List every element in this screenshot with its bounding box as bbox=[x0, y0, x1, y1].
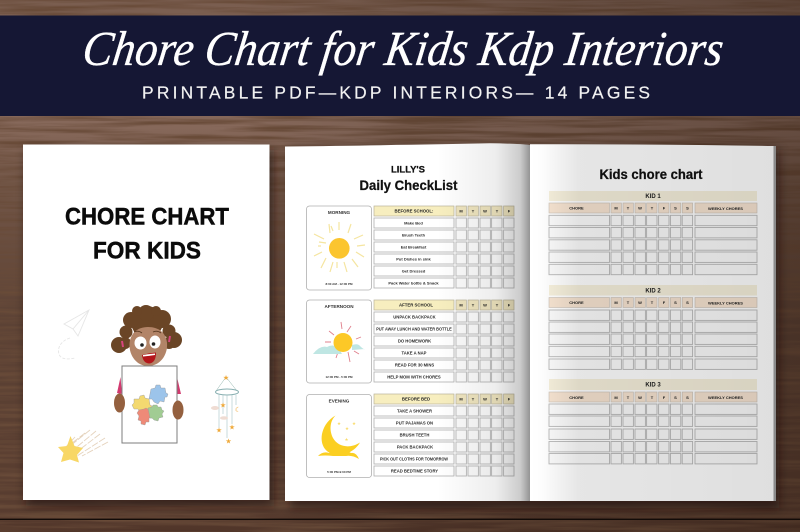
checklist heading: LILLY'S bbox=[391, 164, 425, 176]
panel: morning: BEFORE SCHOOL: bbox=[395, 208, 434, 214]
kid 1 table header: S bbox=[674, 206, 677, 210]
icon: sun and cloud bbox=[313, 322, 365, 362]
kid 3 table header: T bbox=[651, 395, 654, 400]
panel: evening: T bbox=[472, 396, 475, 402]
icon: baby mobile: ★ bbox=[225, 438, 232, 446]
kid 1 table header bbox=[549, 203, 757, 213]
kid 3 table header: WEEKLY CHORES bbox=[708, 395, 743, 400]
face bbox=[129, 327, 167, 366]
table: kid 3: KID 3 bbox=[645, 382, 661, 388]
afternoon card bbox=[306, 300, 372, 383]
kid 3 table header bbox=[549, 392, 757, 402]
kid 1 table header: WEEKLY CHORES bbox=[708, 206, 743, 211]
icon: baby mobile: ★ bbox=[216, 426, 222, 434]
afternoon checklist rows: READ FOR 30 MINS bbox=[395, 362, 434, 368]
table: kid 1 bbox=[549, 191, 757, 275]
kid 3 table header: T bbox=[627, 395, 630, 400]
kid 2 table header: W bbox=[638, 300, 642, 305]
evening checklist header bbox=[374, 394, 454, 404]
afternoon checklist header bbox=[374, 300, 454, 310]
icon: baby mobile: ★ bbox=[220, 402, 226, 410]
page fold shading bbox=[285, 143, 774, 501]
icon: paper plane bbox=[58, 310, 89, 359]
icon: baby mobile: ★ bbox=[223, 374, 229, 382]
evening checklist rows: READ BEDTIME STORY bbox=[391, 468, 438, 474]
panel: afternoon: T bbox=[496, 302, 499, 308]
kid 1 table header: T bbox=[651, 206, 654, 210]
icon: shooting star bbox=[58, 430, 108, 462]
poster bbox=[122, 366, 177, 443]
morning checklist header bbox=[374, 206, 454, 216]
afternoon checklist rows: HELP MOM WITH CHORES bbox=[387, 374, 441, 380]
morning checklist rows: Get Dressed bbox=[402, 268, 426, 274]
kid 1 table header: M bbox=[614, 206, 618, 210]
panel: evening: 5:00 PM-9:00 PM bbox=[327, 470, 351, 474]
morning checklist rows: Put Dishes in sink bbox=[396, 256, 432, 262]
evening checklist rows: BRUSH TEETH bbox=[400, 432, 429, 438]
kid 2 table header: S bbox=[686, 300, 689, 305]
panel: afternoon: 12:00 PM - 5:00 PM bbox=[325, 375, 353, 379]
icon: crescent moon: ★ bbox=[352, 421, 357, 426]
panel: evening: T bbox=[496, 396, 499, 402]
right page bbox=[530, 144, 774, 501]
kid 1 table header: CHORE bbox=[569, 206, 584, 210]
table: kid 3 bbox=[549, 379, 757, 464]
kid 2 table header: F bbox=[663, 300, 666, 305]
kid 3 table header: W bbox=[638, 395, 642, 400]
panel: evening: F bbox=[508, 396, 511, 402]
arms bbox=[117, 377, 181, 394]
kid 1 table header: T bbox=[627, 206, 630, 210]
panel: evening: BEFORE BED bbox=[402, 396, 430, 402]
puzzle pieces bbox=[132, 385, 168, 425]
kid 1 table header: W bbox=[638, 206, 642, 210]
afternoon checklist rows: TAKE A NAP bbox=[402, 350, 427, 356]
afternoon checklist rows bbox=[374, 312, 514, 382]
morning checklist rows: Make Bed bbox=[404, 220, 423, 226]
kid 2 table header: T bbox=[627, 300, 630, 305]
kid 3 table header: S bbox=[686, 395, 689, 400]
morning checklist rows bbox=[374, 218, 514, 288]
panel: morning: T bbox=[472, 208, 475, 214]
kid 2 table header: T bbox=[651, 300, 654, 305]
panel: afternoon: AFTERNOON bbox=[324, 304, 354, 309]
illustration: girl holding puzzle poster bbox=[111, 305, 184, 443]
cover title: CHORE CHART bbox=[65, 204, 229, 230]
kid 1 table rows bbox=[549, 215, 757, 275]
left page bbox=[285, 143, 530, 501]
panel: morning: T bbox=[496, 208, 499, 214]
kid 1 table header: F bbox=[663, 206, 666, 210]
panel: afternoon: W bbox=[483, 302, 487, 308]
table: kid 2: KID 2 bbox=[645, 288, 661, 294]
kid 2 table header: WEEKLY CHORES bbox=[708, 300, 743, 306]
table: kid 1: KID 1 bbox=[645, 194, 661, 200]
icon: crescent moon: ★ bbox=[345, 426, 350, 431]
panel: morning: W bbox=[483, 208, 487, 214]
kid 3 table header: F bbox=[663, 395, 666, 400]
afternoon checklist rows: DO HOMEWORK bbox=[398, 338, 431, 344]
morning checklist rows: Pack Water bottle & Snack bbox=[388, 280, 439, 286]
evening checklist rows: PUT PAJAMAS ON bbox=[396, 420, 433, 426]
panel: evening: W bbox=[483, 396, 487, 402]
icon: crescent moon: ★ bbox=[344, 437, 349, 442]
afternoon checklist rows: UNPACK BACKPACK bbox=[393, 314, 436, 320]
evening card bbox=[306, 394, 372, 478]
panel: afternoon: AFTER SCHOOL bbox=[399, 302, 433, 308]
kid 3 table header: M bbox=[614, 395, 618, 400]
open book spread bbox=[285, 143, 779, 508]
afternoon checklist rows: PUT AWAY LUNCH AND WATER BOTTLE bbox=[376, 326, 452, 332]
panel: evening: EVENING bbox=[329, 398, 350, 404]
title: Chore Chart for Kids Kdp Interiors bbox=[79, 21, 727, 76]
kid 2 table header: M bbox=[614, 300, 618, 305]
checklist heading: Daily CheckList bbox=[360, 177, 458, 193]
checklist heading bbox=[360, 164, 458, 193]
icon: baby mobile: ★ bbox=[229, 424, 235, 432]
icon: baby mobile: ☾ bbox=[235, 406, 241, 414]
title banner bbox=[0, 16, 800, 116]
morning card bbox=[306, 206, 372, 290]
panel: morning: MORNING bbox=[328, 210, 351, 215]
panel: morning: 8:00 AM - 12:00 PM bbox=[325, 282, 353, 286]
hands bbox=[114, 394, 125, 412]
kid 2 table header: S bbox=[674, 300, 677, 305]
panel: morning: M bbox=[459, 208, 463, 214]
subtitle: PRINTABLE PDF—KDP INTERIORS— 14 PAGES bbox=[142, 83, 650, 103]
icon: sun bbox=[314, 222, 365, 272]
icon: baby mobile bbox=[211, 374, 241, 446]
panel: afternoon: F bbox=[508, 302, 511, 308]
cover title: FOR KIDS bbox=[93, 238, 201, 264]
panel: afternoon: M bbox=[459, 302, 463, 308]
evening checklist rows: PICK OUT CLOTHS FOR TOMORROW bbox=[380, 456, 448, 462]
table: kid 2 bbox=[549, 285, 757, 369]
panel: evening: M bbox=[459, 396, 463, 402]
panel: afternoon bbox=[306, 300, 514, 383]
book cover page bbox=[23, 144, 274, 506]
kid 1 table header: S bbox=[686, 206, 689, 210]
panel: evening bbox=[306, 394, 514, 478]
morning checklist rows: Eat Breakfast bbox=[401, 244, 427, 250]
kid 2 table rows bbox=[549, 310, 757, 369]
kid 3 table rows bbox=[549, 404, 757, 464]
icon: crescent moon: ★ bbox=[337, 421, 342, 426]
evening checklist rows bbox=[374, 406, 514, 476]
morning checklist rows: Brush Teeth bbox=[402, 232, 426, 238]
kid 2 table header: CHORE bbox=[569, 300, 584, 305]
panel: morning: F bbox=[508, 208, 511, 214]
evening checklist rows: PACK BACKPACK bbox=[397, 444, 433, 450]
hair and pigtails bbox=[111, 305, 182, 353]
panel: morning bbox=[306, 206, 514, 290]
chore chart heading: Kids chore chart bbox=[600, 167, 703, 182]
icon: crescent moon bbox=[318, 416, 360, 459]
panel: afternoon: T bbox=[472, 302, 475, 308]
evening checklist rows: TAKE A SHOWER bbox=[397, 408, 432, 414]
kid 3 table header: S bbox=[674, 395, 677, 400]
cover title bbox=[65, 204, 229, 264]
kid 3 table header: CHORE bbox=[569, 395, 584, 400]
kid 2 table header bbox=[549, 298, 757, 308]
